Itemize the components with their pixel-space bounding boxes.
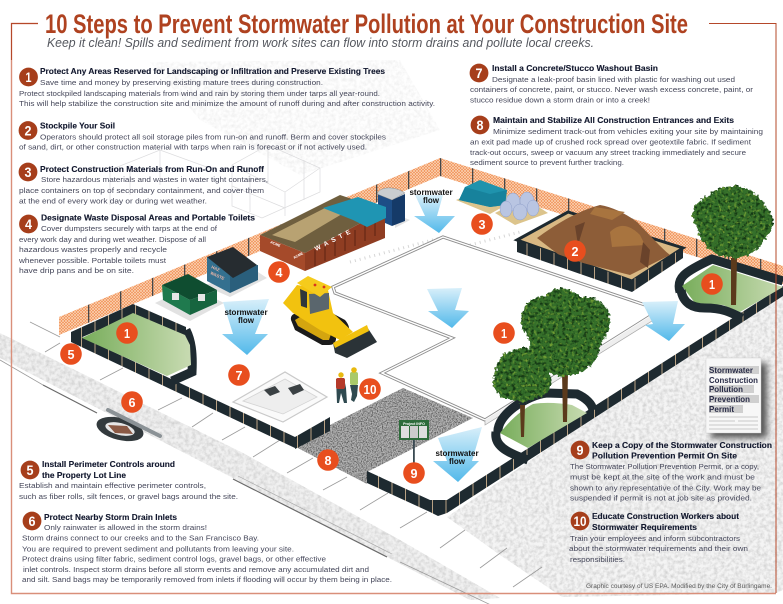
step 9 text block: Keep a Copy of the Stormwater Construction bbox=[592, 440, 772, 450]
orange step markers on the illustration: 9 bbox=[410, 466, 418, 481]
orange step markers on the illustration: 6 bbox=[128, 395, 136, 410]
image credit: Graphic courtesy of US EPA. Modified by the City of Burlingame. bbox=[586, 583, 772, 590]
waste dumpster with tarp: WASTE bbox=[314, 227, 355, 253]
ground: street strip, sidewalk and lot texture bbox=[0, 232, 783, 604]
step 10 text block: Train your employees and inform subcontractors bbox=[570, 534, 740, 543]
step 2 text block: 2 bbox=[24, 122, 32, 138]
step 6 text block: Storm drains connect to our creeks and to the San Francisco Bay. bbox=[22, 534, 259, 542]
permit document: Prevention bbox=[709, 395, 750, 404]
step 7 text block: stucco residue down a storm drain or into a creek! bbox=[470, 96, 650, 104]
gravel construction entrance bbox=[296, 388, 473, 484]
orange step markers on the illustration: 4 bbox=[276, 265, 283, 280]
landscaped area: center plot with fence bbox=[496, 393, 593, 460]
orange construction fence bbox=[59, 158, 783, 335]
step 8 text block: sediment source to prevent further tracking. bbox=[470, 158, 624, 167]
subtitle: Keep it clean! Spills and sediment from work sites can flow into storm drains and pollute local creeks. bbox=[47, 35, 594, 50]
stormwater flow arrow: left bbox=[222, 299, 269, 355]
step 7 text block bbox=[470, 63, 753, 104]
landscaped area: left plot with fence bbox=[71, 304, 192, 381]
step 8 text block: 8 bbox=[476, 117, 484, 133]
landscaped area: right plot with fence bbox=[679, 259, 783, 318]
step 9 text block: The Stormwater Pollution Prevention Permit, or a copy, bbox=[570, 462, 759, 471]
step 9 text block: 9 bbox=[576, 442, 584, 458]
orange step markers on the illustration: 2 bbox=[572, 244, 578, 259]
step 7 text block: Designate a leak-proof basin lined with plastic for washing out used bbox=[492, 75, 735, 84]
step 4 text block: 4 bbox=[25, 216, 32, 232]
waste dumpster with tarp: ACME bbox=[270, 240, 281, 248]
background sketch: faint house frame and ground texture bbox=[110, 60, 440, 218]
step 8 text block bbox=[470, 115, 763, 167]
step 6 text block: inlet controls. Inspect storm drains before all storm events and remove any accumulated dirt and bbox=[23, 565, 369, 574]
step 1 text block: Save time and money by preserving existing mature trees during construction. bbox=[40, 78, 323, 87]
step 1 text block: Protect stockpiled landscaping materials from wind and rain by storing them under tarps all year-round. bbox=[19, 89, 380, 98]
stormwater flow arrow: top: flow bbox=[423, 196, 440, 205]
orange step markers on the illustration: 5 bbox=[68, 347, 74, 362]
portable toilet bbox=[377, 188, 410, 228]
step 4 text block: Cover dumpsters securely with tarps at the end of bbox=[41, 224, 218, 233]
step 10 text block: about the stormwater requirements and their own bbox=[569, 544, 748, 553]
building foundation outline bbox=[333, 237, 660, 425]
stormwater flow arrow: top: stormwater bbox=[409, 188, 453, 197]
orange step markers on the illustration: 1 bbox=[709, 277, 715, 292]
step 3 text block: place containers on top of secondary containment, and cover them bbox=[19, 186, 264, 195]
step 10 text block: Stormwater Requirements bbox=[592, 522, 697, 532]
stormwater flow arrow: left: flow bbox=[238, 316, 255, 325]
project sign: Project INFO bbox=[403, 422, 425, 426]
step 7 text block: containers of concrete, paint, or stucco. Never wash excess concrete, paint, or bbox=[470, 85, 753, 94]
step 6 text block: and silt. Sand bags may be temporarily removed from inlets if flooding will occur by them being in place. bbox=[22, 575, 392, 584]
waste dumpster with tarp bbox=[260, 195, 386, 271]
step 10 text block: responsibilities. bbox=[570, 555, 625, 564]
step 2 text block: of sand, dirt, or other construction material with tarps when rain is forecast or if not actively used. bbox=[19, 142, 367, 152]
step 3 text block: at the end of every work day or during wet weather. bbox=[19, 196, 207, 206]
step 5 text block: Establish and maintain effective perimeter controls, bbox=[19, 481, 206, 490]
hazardous waste dumpster bbox=[203, 247, 267, 297]
step 4 text block: Designate Waste Disposal Areas and Portable Toilets bbox=[41, 212, 255, 222]
orange step markers on the illustration: 10 bbox=[364, 382, 376, 397]
step 3 text block: Protect Construction Materials from Run-On and Runoff bbox=[40, 164, 264, 174]
step 6 text block bbox=[22, 512, 392, 584]
tree: small center tree bbox=[493, 348, 551, 437]
step 1 text block bbox=[19, 66, 435, 108]
step 2 text block bbox=[19, 120, 386, 152]
step 5 text block: 5 bbox=[26, 462, 34, 478]
stormwater flow arrow: left: stormwater bbox=[224, 308, 268, 317]
step 10 text block: Educate Construction Workers about bbox=[592, 511, 739, 521]
waste dumpster with tarp: ACME bbox=[293, 251, 304, 260]
step 6 text block: You are required to prevent sediment and pollutants from leaving your site. bbox=[22, 544, 294, 554]
tree: right tree bbox=[693, 186, 773, 305]
tarped materials on pallets bbox=[456, 180, 548, 225]
orange step markers on the illustration: 1 bbox=[124, 326, 130, 341]
orange step markers on the illustration: 1 bbox=[501, 326, 507, 341]
step 9 text block bbox=[570, 440, 772, 502]
step 2 text block: Stockpile Your Soil bbox=[40, 120, 115, 130]
permit document bbox=[706, 358, 767, 438]
permit document: Pollution bbox=[709, 385, 743, 394]
orange step markers on the illustration: 3 bbox=[478, 217, 486, 232]
tree: large center tree bbox=[521, 288, 610, 422]
step 3 text block: 3 bbox=[24, 164, 32, 180]
step 8 text block: Minimize sediment track-out from vehicles exiting your site by maintaining bbox=[493, 127, 763, 136]
step 4 text block: have drip pans and be on site. bbox=[19, 266, 134, 275]
step 6 text block: Only rainwater is allowed in the storm drains! bbox=[44, 523, 207, 532]
step 8 text block: an exit pad made up of crushed rock spread over geotextile fabric. If sediment bbox=[470, 138, 752, 146]
step 1 text block: 1 bbox=[26, 69, 32, 85]
stormwater flow arrow: bottom: flow bbox=[449, 457, 466, 466]
orange step markers on the illustration: 7 bbox=[236, 368, 242, 383]
stormwater flow arrow: bottom: stormwater bbox=[435, 449, 479, 458]
step 8 text block: track-out occurs, sweep or vacuum any street tracking immediately and secure bbox=[470, 148, 746, 157]
green dumpster bbox=[155, 274, 224, 321]
step 4 text block: whenever possible. Portable toilets must bbox=[18, 256, 167, 265]
step 1 text block: Protect Any Areas Reserved for Landscaping or Infiltration and Preserve Existing Trees bbox=[40, 66, 385, 76]
hazardous waste dumpster: WASTE bbox=[210, 270, 225, 281]
construction workers bbox=[336, 367, 358, 403]
permit document: Stormwater bbox=[709, 366, 754, 375]
step 5 text block: the Property Lot Line bbox=[42, 470, 126, 480]
step 5 text block: Install Perimeter Controls around bbox=[42, 459, 175, 469]
step 9 text block: Pollution Prevention Permit On Site bbox=[592, 450, 737, 460]
step 1 text block: This will help stabilize the construction site and minimize the amount of runoff during and after construction activity. bbox=[19, 99, 435, 108]
step 3 text block: Store hazardous materials and wastes in water tight containers, bbox=[41, 175, 268, 184]
orange step markers on the illustration: 8 bbox=[324, 453, 332, 468]
step 5 text block: such as fiber rolls, silt fences, or gravel bags around the site. bbox=[19, 492, 238, 501]
hazardous waste dumpster: HAZ bbox=[211, 264, 221, 273]
step 6 text block: Protect drains using filter fabric, sediment control logs, gravel bags, or other effective bbox=[22, 554, 326, 564]
step 6 text block: 6 bbox=[28, 513, 36, 529]
orange step markers on the illustration bbox=[60, 213, 723, 484]
storm drain inlet with protection bbox=[94, 410, 160, 445]
concrete washout basin bbox=[233, 372, 327, 422]
step 3 text block bbox=[19, 163, 268, 206]
step 7 text block: Install a Concrete/Stucco Washout Basin bbox=[492, 63, 658, 73]
step 10 text block: 10 bbox=[574, 513, 587, 529]
step 2 text block: Operators should protect all soil storage piles from run-on and runoff. Berm and cover stockpiles bbox=[40, 132, 386, 142]
permit document: Permit bbox=[709, 405, 734, 414]
step 9 text block: must be kept at the site of the work and must be bbox=[570, 472, 755, 482]
step 8 text block: Maintain and Stabilize All Construction Entrances and Exits bbox=[493, 115, 734, 125]
step 9 text block: suspended if permit is not at job site as provided. bbox=[570, 494, 752, 502]
step 4 text block: every work day and during wet weather. Dispose of all bbox=[19, 235, 206, 244]
stormwater flow arrow: top bbox=[409, 188, 455, 233]
step 4 text block bbox=[18, 212, 255, 275]
step 5 text block bbox=[19, 459, 238, 501]
flow arrow: right bbox=[642, 301, 685, 341]
project sign bbox=[399, 420, 429, 464]
step 6 text block: Protect Nearby Storm Drain Inlets bbox=[44, 512, 177, 522]
permit document: Construction bbox=[709, 376, 758, 385]
flow arrow: center bbox=[427, 288, 469, 328]
soil stockpile with berm bbox=[517, 205, 683, 292]
step 9 text block: shown to any representative of the City. Work may be bbox=[570, 484, 761, 492]
stormwater flow arrow: bottom bbox=[433, 427, 482, 482]
perimeter fence: silt fence along the property line bbox=[71, 286, 783, 516]
step 4 text block: hazardous wastes properly and recycle bbox=[19, 245, 167, 254]
tracked loader bbox=[283, 276, 377, 358]
step 10 text block bbox=[569, 511, 748, 564]
step 7 text block: 7 bbox=[476, 65, 483, 81]
